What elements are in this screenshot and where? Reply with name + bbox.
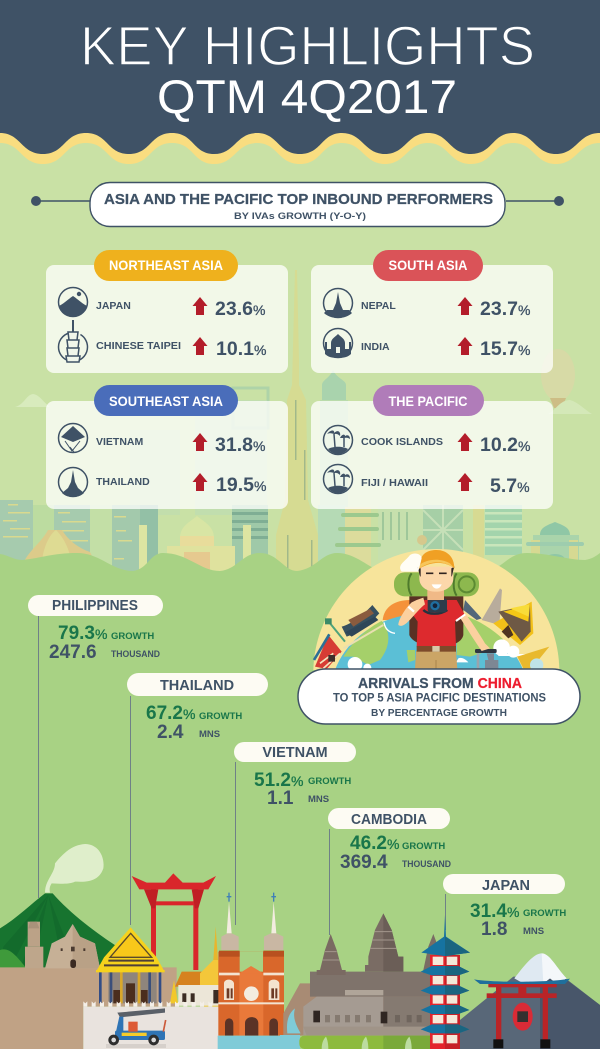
panel: Northeast Asia: NORTHEAST ASIA [109, 257, 223, 273]
stat: Cambodia: CAMBODIA [351, 812, 427, 828]
stat: Japan: GROWTH [523, 908, 566, 919]
leader lines [38, 616, 446, 935]
Paoay church [25, 922, 100, 968]
thai temple and stupa [463, 588, 549, 668]
callout: arrivals from China: ARRIVALS FROM CHINA [358, 676, 523, 692]
stat: Vietnam: MNS [308, 794, 329, 805]
Thai temple complex [170, 927, 220, 1007]
Burj [276, 270, 318, 580]
panel: South Asia: 15.7% [480, 338, 530, 360]
lotus [20, 530, 100, 572]
water [218, 1036, 300, 1049]
tuk-tuk [106, 1008, 166, 1048]
panel: South Asia: SOUTH ASIA [388, 257, 468, 273]
stat: Philippines: 79.3% [58, 623, 107, 644]
callout: arrivals from China: BY PERCENTAGE GROWTH [371, 707, 507, 719]
panel: The Pacific: 10.2% [480, 434, 530, 456]
traveller illustration [313, 549, 559, 672]
neck and head [427, 587, 444, 600]
panel: South Asia: 23.7% [480, 298, 530, 320]
panel: The Pacific [311, 385, 553, 509]
panel: Northeast Asia: 10.1% [216, 338, 266, 360]
landmarks left: Philippines, Thailand, Vietnam [0, 844, 300, 1049]
red temple [314, 634, 342, 669]
stat: Philippines: THOUSAND [111, 649, 160, 660]
panel: Northeast Asia [46, 250, 288, 373]
stat: Japan: JAPAN [482, 878, 530, 894]
stat: Cambodia: THOUSAND [402, 859, 451, 870]
stat: Thailand [127, 673, 268, 743]
shirt [408, 600, 465, 647]
pagoda [421, 915, 470, 1049]
bedroll [394, 572, 479, 596]
panel: The Pacific: FIJI / HAWAII [361, 477, 428, 489]
arms [398, 598, 425, 626]
icon: Cook Islands palms [324, 426, 352, 454]
stat: Japan [443, 874, 566, 940]
title: KEY HIGHLIGHTS [80, 14, 535, 77]
stat: Thailand: THAILAND [160, 678, 234, 694]
stat: Cambodia: GROWTH [402, 841, 445, 852]
stat: Philippines: 247.6 [49, 642, 97, 663]
torii [474, 979, 570, 1048]
icon: India Taj Mahal [324, 328, 352, 358]
panel: The Pacific: 5.7% [490, 475, 530, 497]
stat: Japan: 1.8 [481, 919, 507, 940]
section heading: BY IVAs GROWTH (Y-O-Y) [234, 211, 366, 222]
right buildings [318, 505, 346, 567]
panel: Southeast Asia: THAILAND [96, 476, 150, 488]
subtitle: QTM 4Q2017 [157, 70, 457, 123]
section heading [31, 182, 564, 226]
luggage [475, 649, 498, 669]
stat: Cambodia [328, 808, 451, 873]
volcano [0, 893, 120, 968]
callout: arrivals from China: TO TOP 5 ASIA PACIFIC DESTINATIONS [333, 690, 546, 704]
faint city skyline background [0, 270, 592, 580]
panel: South Asia [311, 250, 553, 373]
icon: Japan mountain [58, 288, 88, 317]
icon: Taipei 101 [58, 320, 88, 362]
minarets and Taj [139, 525, 147, 572]
stat: Japan: MNS [523, 926, 544, 937]
garden [299, 1036, 468, 1049]
stat: Thailand: 2.4 [157, 722, 184, 743]
icon: Nepal stupa [324, 288, 352, 318]
cap [418, 550, 454, 570]
panel: Northeast Asia: 23.6% [215, 298, 265, 320]
stat: Vietnam: VIETNAM [262, 745, 328, 761]
panel: Southeast Asia: 19.5% [216, 474, 266, 496]
green hills ground [0, 553, 600, 1049]
header banner [0, 0, 600, 164]
legs [415, 651, 457, 669]
stat: Vietnam [234, 742, 356, 809]
panel: Southeast Asia: SOUTHEAST ASIA [109, 393, 223, 409]
callout: arrivals from China [298, 669, 580, 724]
Fuji [460, 953, 600, 1049]
korean palace [325, 605, 383, 648]
camera [423, 610, 447, 614]
stat: Thailand: GROWTH [199, 711, 242, 722]
backpack [409, 595, 463, 647]
left buildings [0, 500, 90, 575]
stat: Vietnam: 51.2% [254, 770, 303, 791]
icon: Thailand chedi [58, 468, 88, 497]
stat: Philippines: GROWTH [111, 631, 154, 642]
icon: Vietnam conical hat [58, 424, 88, 452]
panel: The Pacific: THE PACIFIC [388, 393, 468, 409]
panel: South Asia: INDIA [361, 341, 390, 353]
giant swing [132, 873, 216, 970]
landmarks right: Cambodia, Japan [280, 913, 600, 1049]
white wall [83, 1001, 220, 1049]
volcano plume [45, 844, 104, 893]
Angkor Wat [283, 913, 439, 1036]
stat: Vietnam: GROWTH [308, 776, 351, 787]
section heading: ASIA AND THE PACIFIC TOP INBOUND PERFORMERS [104, 191, 493, 208]
stat: Thailand: 67.2% [146, 703, 195, 724]
stat: Japan: 31.4% [470, 901, 519, 922]
stat: Cambodia: 46.2% [350, 833, 399, 854]
panel: Southeast Asia: VIETNAM [96, 436, 144, 448]
panel: Northeast Asia: CHINESE TAIPEI [96, 340, 181, 352]
panel: Southeast Asia: 31.8% [215, 434, 265, 456]
stat: Cambodia: 369.4 [340, 852, 388, 873]
panel: Southeast Asia [46, 385, 288, 509]
ground [0, 967, 177, 1049]
icon: Fiji palms [324, 464, 352, 494]
panel: The Pacific: COOK ISLANDS [361, 436, 443, 448]
stat: Philippines [28, 595, 163, 663]
panel: Northeast Asia: JAPAN [96, 300, 131, 312]
Notre Dame Saigon [218, 893, 284, 1036]
stat: Philippines: PHILIPPINES [52, 598, 138, 614]
water and fountain [280, 1008, 310, 1049]
balloon [541, 349, 575, 401]
Thai pavilion [96, 927, 165, 1003]
stat: Thailand: MNS [199, 729, 220, 740]
panel: South Asia: NEPAL [361, 300, 396, 312]
stat: Vietnam: 1.1 [267, 788, 294, 809]
